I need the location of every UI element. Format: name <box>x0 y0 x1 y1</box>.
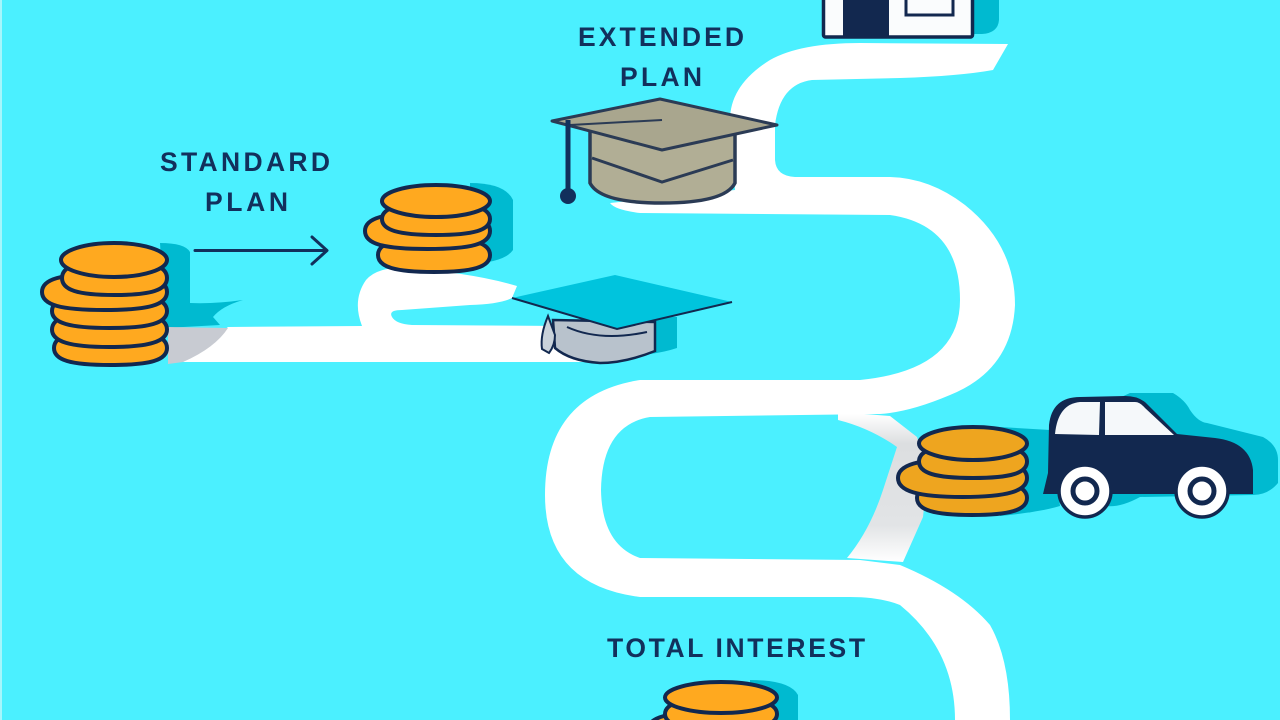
shadow <box>1000 427 1060 516</box>
shadow <box>650 316 677 354</box>
road: main winding path <box>545 43 1015 720</box>
base <box>590 130 735 203</box>
shadow <box>1050 393 1278 506</box>
highlight line <box>570 120 662 125</box>
coins <box>898 427 1027 515</box>
body <box>1043 396 1253 494</box>
tassel <box>542 316 555 353</box>
heading: total interest: TOTAL INTEREST <box>607 633 865 663</box>
tassel <box>560 120 576 204</box>
road shadow <box>168 327 228 364</box>
icon: house <box>824 0 999 37</box>
heading: standard plan <box>160 147 330 217</box>
shadow <box>470 183 513 264</box>
icon: tan graduation cap <box>552 99 777 204</box>
chevron <box>592 158 733 182</box>
coin stack: beside car <box>898 427 1060 516</box>
coin stack: standard plan start <box>42 243 243 365</box>
heading: standard plan: PLAN <box>205 187 288 217</box>
road: standard plan path <box>183 268 600 362</box>
base <box>553 320 655 363</box>
coin stack: total interest <box>648 680 798 720</box>
front wheel <box>1059 465 1111 517</box>
arrow <box>195 237 327 264</box>
shadow <box>750 680 798 720</box>
heading: extended plan: PLAN <box>620 62 702 92</box>
door <box>843 0 889 36</box>
heading: extended plan: EXTENDED <box>578 22 744 52</box>
heading: standard plan: STANDARD <box>160 147 330 177</box>
heading: extended plan <box>578 22 744 92</box>
wall <box>824 0 972 37</box>
coins <box>42 243 167 365</box>
coins <box>648 682 777 720</box>
rear wheel <box>1176 465 1228 517</box>
board <box>552 99 777 150</box>
windows <box>1055 402 1100 435</box>
road branch: to and from car coins <box>838 412 928 562</box>
coin stack: standard plan end <box>365 183 513 272</box>
icon: car <box>1043 393 1278 517</box>
icon: teal graduation cap <box>512 275 732 363</box>
shadow <box>960 0 999 34</box>
shadow <box>160 243 243 328</box>
window <box>906 0 953 15</box>
coins <box>365 185 490 272</box>
inner line <box>567 327 647 336</box>
board <box>512 275 732 329</box>
